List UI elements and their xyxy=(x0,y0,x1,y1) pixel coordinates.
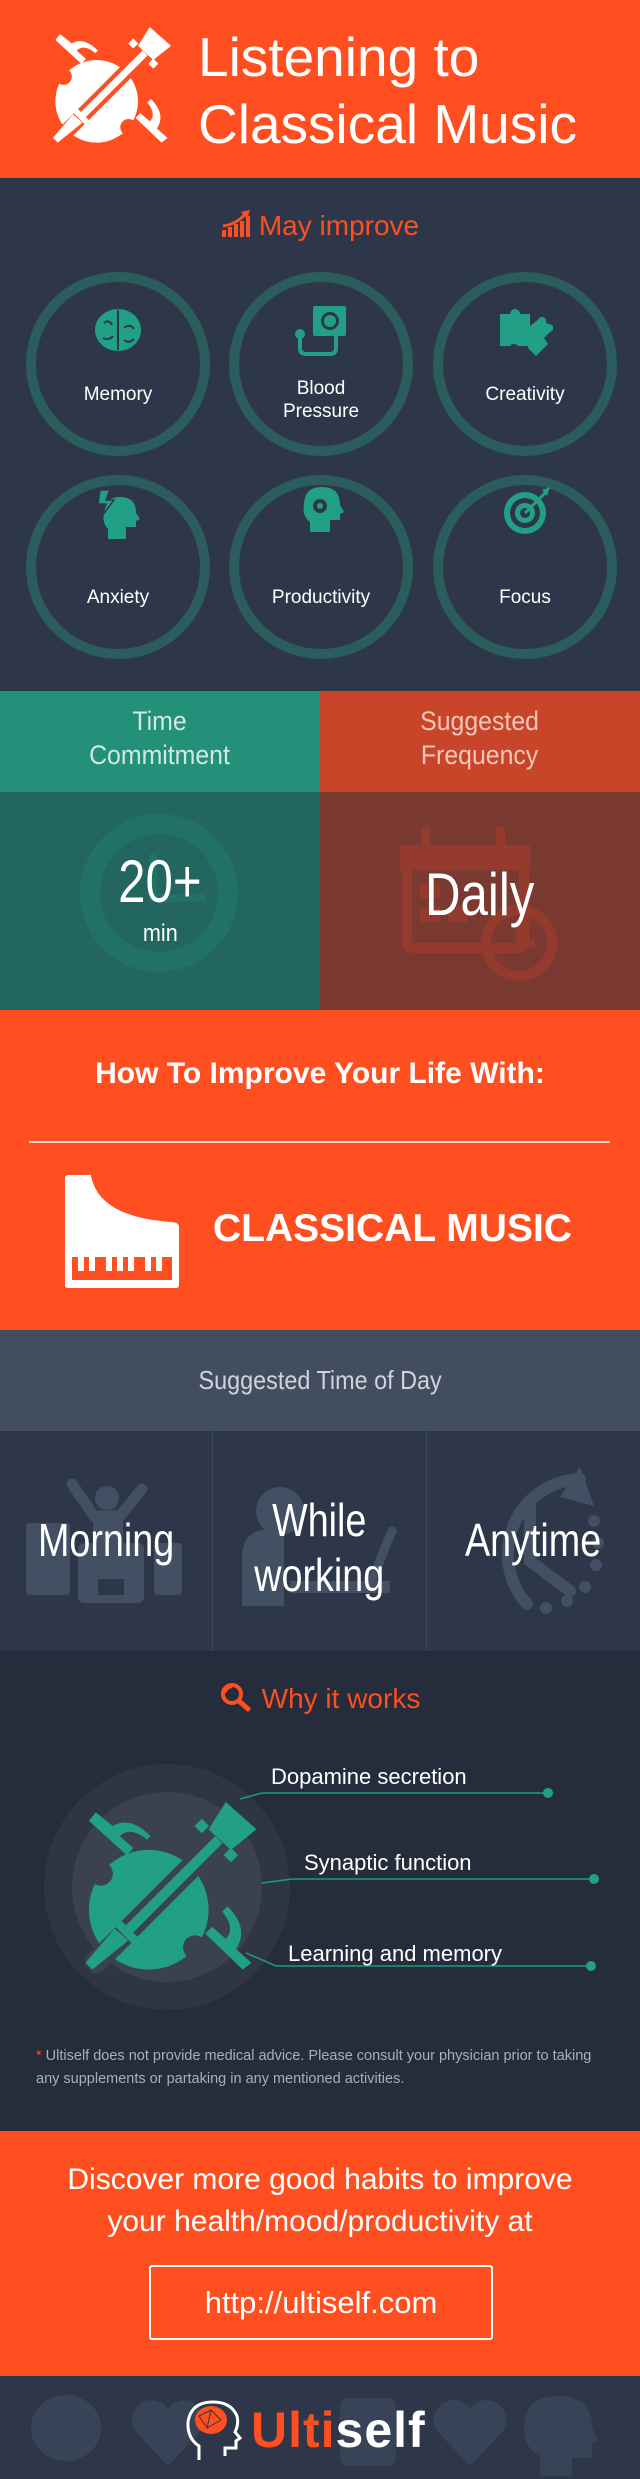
heading: how to improve: How To Improve Your Life With: xyxy=(95,1057,545,1090)
heading: suggested frequency xyxy=(320,691,640,792)
heading: why it works: Why it works xyxy=(262,1683,420,1714)
stat: 20+ min: min xyxy=(143,920,177,947)
stat: daily: Daily xyxy=(425,861,535,928)
text: anytime: Anytime xyxy=(465,1514,602,1566)
icon: anytime clock xyxy=(508,1479,580,1604)
footer xyxy=(0,2376,640,2479)
benefit labels: Creativity xyxy=(485,384,565,405)
icon: working at desk xyxy=(242,1487,392,1606)
stat: 20+ min xyxy=(0,792,320,1010)
panel: time of day options xyxy=(0,1431,640,1651)
text: while working: While xyxy=(272,1494,367,1546)
icon: target xyxy=(504,487,550,534)
icon: brain xyxy=(95,309,141,351)
heading: time commitment xyxy=(0,691,320,792)
heading: may improve: May improve xyxy=(259,210,419,241)
icon: puzzle xyxy=(500,309,553,356)
benefit labels xyxy=(84,378,565,608)
icon: blood pressure xyxy=(295,306,346,354)
cta text: Discover more good habits to improve xyxy=(67,2163,573,2196)
url button: http://ultiself.com xyxy=(205,2285,437,2320)
cta text xyxy=(67,2163,573,2238)
icon: anxiety head xyxy=(98,490,140,539)
icon: violin xyxy=(53,27,171,143)
heading: suggested frequency: Suggested xyxy=(421,706,539,736)
logo text: Ultiself xyxy=(251,2402,426,2458)
url button xyxy=(149,2265,493,2340)
text: while working xyxy=(254,1494,384,1601)
heading: time commitment: Commitment xyxy=(90,740,230,770)
disclaimer: * Ultiself does not provide medical advice. Please consult your physician prior to taking any supplements or partaking in any mentioned activities. xyxy=(36,2048,591,2087)
heading: time commitment: Time xyxy=(133,706,187,736)
panel: time commitment xyxy=(0,691,320,1010)
panel: why it works xyxy=(0,1651,640,2131)
benefit circles xyxy=(26,272,617,659)
benefit labels: Focus xyxy=(499,587,551,608)
benefit labels: Blood xyxy=(297,378,345,399)
heading: suggested time of day xyxy=(0,1330,640,1431)
diagram: violin with mechanisms: Dopamine secretion xyxy=(271,1764,467,1789)
text: classical music: CLASSICAL MUSIC xyxy=(213,1207,572,1250)
text: while working: working xyxy=(255,1549,384,1601)
stat: 20+ min: 20+ xyxy=(118,848,202,915)
heading: suggested frequency: Frequency xyxy=(421,740,539,770)
header xyxy=(0,0,640,178)
stat: daily xyxy=(320,792,640,1010)
title: Classical Music xyxy=(198,93,577,155)
benefit labels: Pressure xyxy=(283,401,359,422)
benefit labels: Anxiety xyxy=(87,587,150,608)
diagram: violin with mechanisms xyxy=(44,1764,599,2010)
icon: piano xyxy=(65,1175,179,1288)
panel: may improve xyxy=(0,178,640,691)
cta text: your health/mood/productivity at xyxy=(107,2205,533,2238)
benefit labels: Memory xyxy=(84,384,153,405)
panel: how to improve xyxy=(0,1010,640,1330)
icon: productivity head xyxy=(304,487,344,532)
heading: suggested time of day: Suggested Time of Day xyxy=(198,1365,442,1395)
panel: suggested frequency xyxy=(320,691,640,1010)
benefit labels: Productivity xyxy=(272,587,371,608)
logo xyxy=(186,2400,426,2460)
title xyxy=(198,26,577,155)
panel: call to action xyxy=(0,2131,640,2376)
diagram: violin with mechanisms: Synaptic function xyxy=(304,1850,472,1875)
icon: morning stretch xyxy=(26,1484,182,1603)
text: morning: Morning xyxy=(38,1514,174,1566)
title: Listening to xyxy=(198,26,479,88)
icon: brain head xyxy=(186,2400,242,2460)
diagram: violin with mechanisms: Learning and memory xyxy=(288,1941,502,1966)
